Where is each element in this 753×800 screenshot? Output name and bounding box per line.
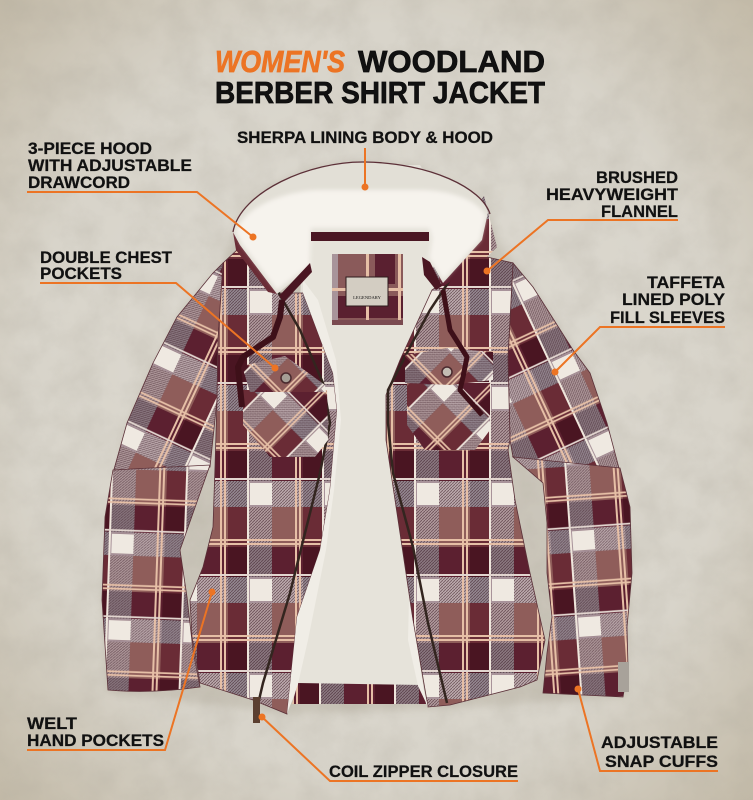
- callout: sleeves: FILL SLEEVES: [610, 308, 725, 327]
- title: [215, 44, 545, 110]
- right sleeve upper: [508, 263, 620, 472]
- right pocket flap: [405, 348, 493, 385]
- neck band: [311, 232, 429, 241]
- left pocket: [243, 390, 328, 457]
- right sleeve lower: [513, 457, 632, 697]
- hood outline: [233, 162, 490, 232]
- hood fleece: [233, 162, 488, 294]
- right drawcord: [443, 290, 482, 415]
- left snap: [281, 373, 291, 383]
- right pocket: [407, 383, 490, 450]
- hood left trim edge: [233, 232, 277, 294]
- callout: cuffs: [574, 686, 718, 771]
- callout: hood: 3-PIECE HOOD: [28, 139, 152, 158]
- callout: hand pockets: HAND POCKETS: [27, 731, 164, 750]
- callout: hood: [27, 139, 256, 240]
- brand patch: LEGENDARY: [353, 295, 382, 300]
- callout: cuffs: ADJUSTABLE: [601, 733, 718, 752]
- callout: sleeves: TAFFETA: [647, 273, 725, 292]
- hood right trim: [422, 257, 442, 290]
- callout: flannel: HEAVYWEIGHT: [546, 185, 679, 204]
- callout: hand pockets: [27, 588, 216, 750]
- hood left trim: [279, 263, 312, 302]
- callout: chest pockets: POCKETS: [40, 264, 122, 283]
- hood fleece bright lobes: [236, 190, 486, 290]
- hood back fleece: [300, 165, 445, 300]
- hood right plaid side: [430, 196, 497, 286]
- title: WOMEN'S: [215, 44, 345, 79]
- callout: hood: DRAWCORD: [28, 173, 130, 192]
- callout: zipper: COIL ZIPPER CLOSURE: [329, 762, 518, 781]
- title: WOODLAND: [358, 44, 545, 79]
- zipper pull: [253, 697, 260, 723]
- left pocket flap: [242, 356, 326, 392]
- callout: flannel: BRUSHED: [596, 168, 678, 187]
- callout: zipper: [258, 714, 518, 781]
- callout: chest pockets: [40, 248, 278, 372]
- interior sherpa lining: [287, 230, 435, 712]
- callout: cuffs: SNAP CUFFS: [605, 752, 718, 771]
- left front panel: [190, 250, 337, 714]
- callout: chest pockets: DOUBLE CHEST: [40, 248, 173, 267]
- left zipper: [259, 290, 330, 700]
- title: BERBER SHIRT JACKET: [215, 75, 545, 110]
- jacket illustration: [102, 162, 632, 723]
- left placket fleece: [287, 280, 341, 714]
- right zipper: [388, 280, 450, 703]
- right cuff tab: [618, 662, 629, 692]
- callout: sherpa lining: SHERPA LINING BODY & HOOD: [237, 128, 493, 147]
- callout: sherpa lining: [237, 128, 493, 190]
- callout: hood: WITH ADJUSTABLE: [28, 156, 192, 175]
- left sleeve upper: [113, 263, 223, 473]
- callout: hand pockets: WELT: [27, 714, 78, 733]
- right front panel: [386, 257, 545, 707]
- callout: flannel: [484, 168, 679, 274]
- callout: flannel: FLANNEL: [601, 202, 678, 221]
- bottom hem band: [292, 683, 426, 704]
- callout: sleeves: [552, 273, 726, 376]
- callout: sleeves: LINED POLY: [622, 290, 726, 309]
- right fleece bottom: [408, 600, 428, 707]
- left drawcord: [238, 300, 282, 407]
- left sleeve lower: [102, 465, 210, 691]
- jacket soft shadow: [102, 162, 632, 714]
- brand patch: [332, 254, 403, 325]
- right snap: [442, 367, 452, 377]
